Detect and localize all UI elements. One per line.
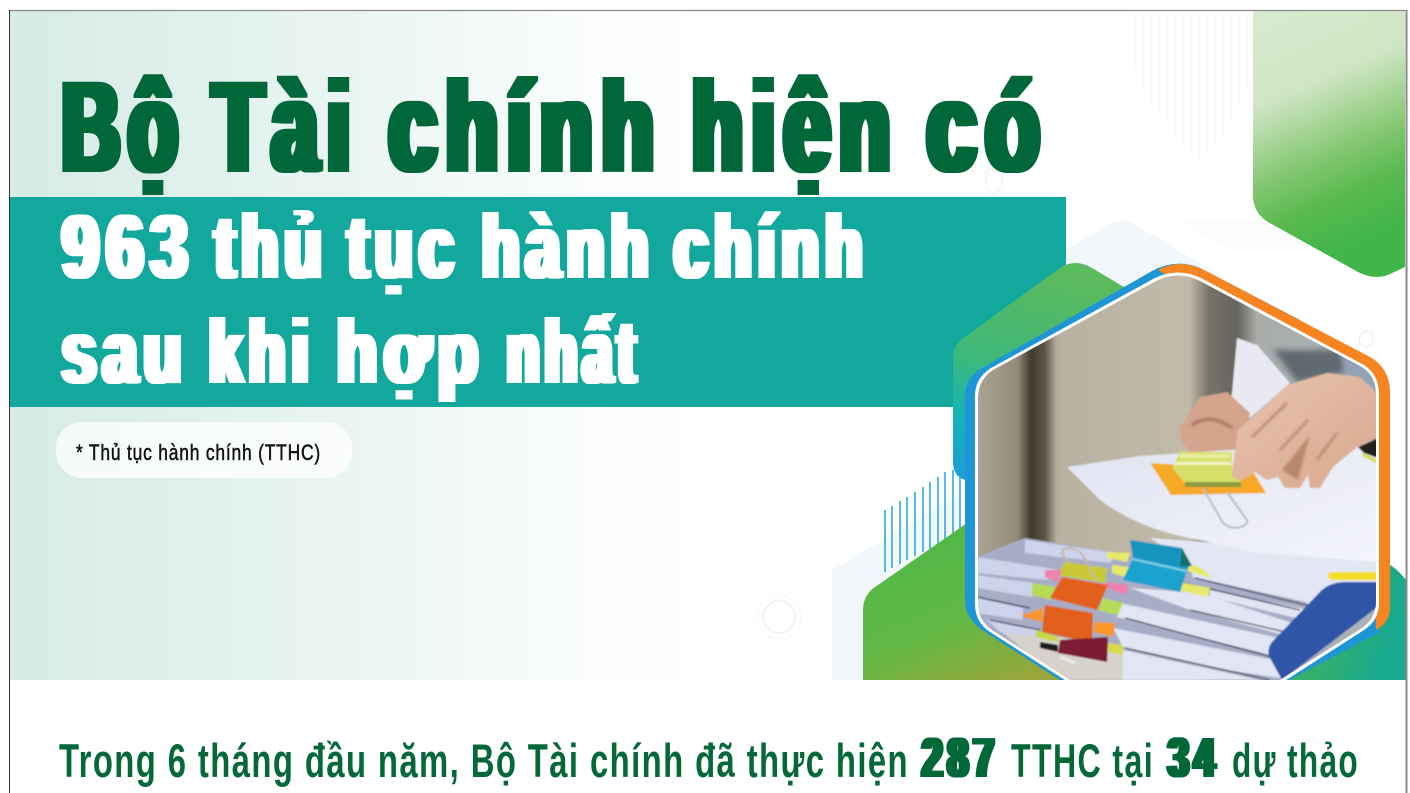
title line 3: sau — [62, 302, 188, 403]
white keyline — [975, 272, 1379, 682]
title line 2: hành — [482, 197, 655, 298]
dark blue corner shape — [1268, 582, 1380, 680]
green hexagon behind photo, top left — [953, 263, 1124, 480]
title line 1: chính — [389, 56, 663, 199]
orange frame — [1158, 264, 1390, 630]
title line 3: hợp — [337, 302, 485, 403]
yellow binder clip — [1172, 452, 1242, 483]
yellow tabs — [1107, 552, 1213, 597]
yellow strip — [1328, 572, 1380, 580]
desk under stack — [1003, 632, 1124, 680]
teal title band — [10, 197, 1066, 407]
summary sentence: 34 — [1168, 726, 1220, 790]
title line 1: hiện — [692, 56, 899, 199]
orange binder clip upper — [1050, 577, 1108, 610]
large curled paper — [1067, 440, 1377, 562]
title line 3: nhất — [507, 302, 641, 403]
photo: hands clipping paper stacks — [970, 260, 1385, 685]
title line 3: khi — [209, 302, 315, 403]
summary sentence: 287 — [922, 726, 999, 790]
sleeve — [1273, 350, 1347, 382]
blue stripes — [885, 470, 960, 572]
summary sentence: TTHC tại — [1011, 734, 1154, 787]
teal binder clip — [1129, 539, 1190, 571]
title line 1: Tài — [213, 56, 359, 199]
title line 2: tục — [348, 197, 460, 298]
desk sheet — [1150, 537, 1376, 605]
blue frame — [965, 264, 1380, 680]
lime tabs — [1032, 583, 1123, 615]
title line 2 — [62, 197, 869, 298]
orange binder clip lower — [1042, 605, 1093, 643]
title line 1: có — [927, 56, 1049, 199]
orange tabs — [1022, 608, 1115, 637]
footnote pill — [56, 422, 352, 478]
title line 2: chính — [674, 197, 869, 298]
stacked paper layers — [977, 540, 1117, 637]
title line 1: Bộ — [62, 56, 186, 199]
wire loop — [1203, 488, 1247, 528]
title line 1 — [62, 56, 1049, 199]
title line 2: thủ — [215, 197, 328, 298]
raised paper sheet — [1230, 337, 1290, 420]
photo frame — [965, 264, 1390, 682]
yellow clip with wire — [1057, 562, 1107, 583]
title line 3 — [62, 302, 641, 403]
back hand — [1180, 392, 1250, 455]
dark red clip — [1058, 637, 1108, 662]
pink tabs — [1045, 570, 1128, 595]
front hand — [1232, 373, 1377, 488]
summary sentence: Trong 6 tháng đầu năm, Bộ Tài chính đã thực hiện — [59, 734, 909, 787]
green hexagon top right — [1253, 11, 1405, 277]
lime bottom tab — [1036, 630, 1058, 642]
paper stack — [977, 538, 1330, 680]
faint decorative hexagons — [756, 166, 1374, 680]
green hexagon bottom right — [1285, 562, 1406, 680]
footnote pill: * Thủ tục hành chính (TTHC) — [76, 440, 321, 465]
orange sticky note — [1150, 463, 1266, 495]
green hexagon bottom left — [863, 523, 1100, 680]
blurred office wall — [970, 260, 1385, 685]
title line 2: 963 — [62, 197, 195, 298]
